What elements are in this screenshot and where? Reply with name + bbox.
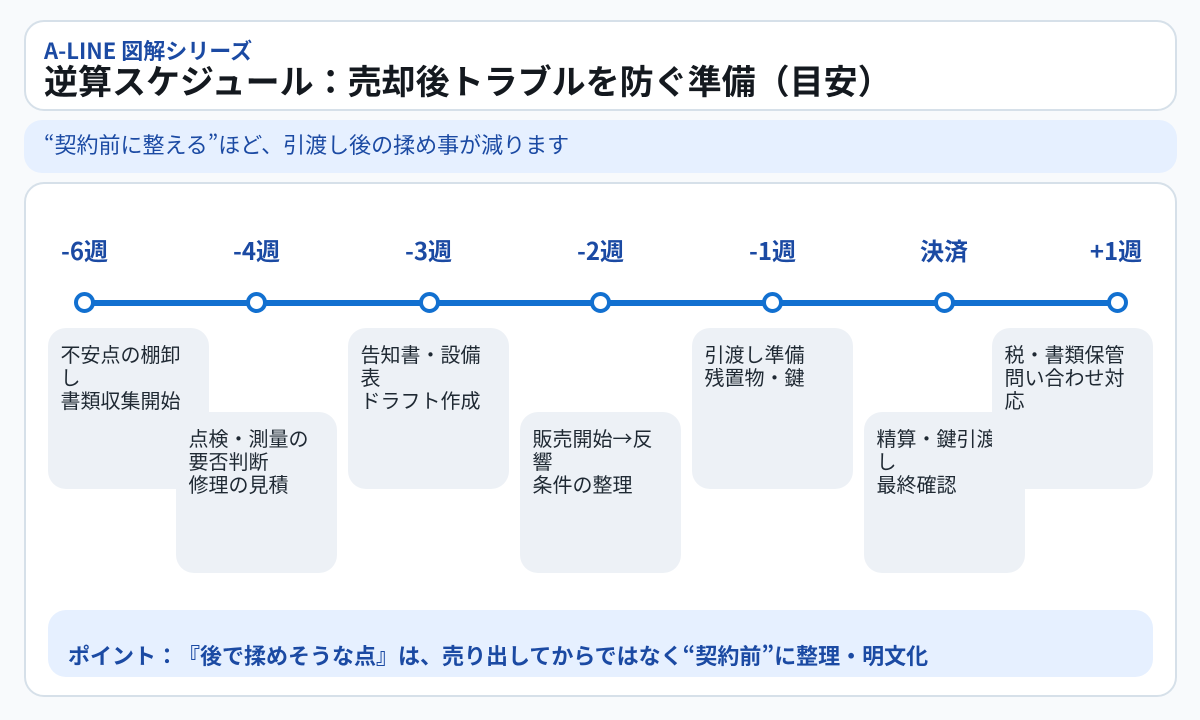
card: -6 weeks: 書類収集開始: [60, 385, 180, 414]
marker: -2 weeks: [590, 292, 611, 313]
series label: A-LINE 図解シリーズ: [44, 34, 252, 66]
card: +1 week: 問い合わせ対: [1004, 362, 1124, 391]
card: +1 week: 応: [1004, 385, 1024, 414]
callout: point: [48, 610, 1153, 677]
panel: timeline: [24, 182, 1177, 697]
card: +1 week: 税・書類保管: [1004, 339, 1124, 368]
week labels: [61, 232, 1142, 267]
card: -1 week: [692, 328, 853, 489]
card: -2 weeks: [520, 412, 681, 573]
card: -2 weeks: 条件の整理: [532, 469, 632, 498]
card: settlement: し: [876, 446, 896, 475]
card: -4 weeks: 修理の見積: [188, 469, 288, 498]
card: -3 weeks: 告知書・設備: [360, 339, 480, 368]
label: -4 weeks: -4週: [233, 232, 280, 267]
marker: -3 weeks: [418, 292, 440, 313]
marker: settlement: [934, 292, 955, 313]
card: -4 weeks: 点検・測量の: [188, 423, 308, 452]
marker: +1 week: [1106, 292, 1128, 313]
panel: header: [24, 20, 1177, 111]
label: settlement: 決済: [920, 232, 968, 267]
card: -2 weeks: 販売開始→反: [532, 423, 652, 452]
card: -1 week: 引渡し準備: [704, 339, 804, 368]
timeline line with markers: [74, 292, 1128, 313]
card: -1 week: 残置物・鍵: [704, 362, 804, 391]
timeline line: [84, 300, 1117, 306]
marker: -1 week: [762, 292, 783, 313]
callout text: ポイント：『後で揉めそうな点』は、売り出してからではなく“契約前”に整理・明文化: [68, 639, 928, 671]
marker: -6 weeks: [74, 292, 95, 313]
label: -3 weeks: -3週: [405, 232, 452, 267]
card: +1 week: [992, 328, 1153, 489]
card: -4 weeks: [176, 412, 337, 573]
title: 逆算スケジュール：売却後トラブルを防ぐ準備（目安）: [44, 55, 892, 104]
label: -2 weeks: -2週: [577, 232, 624, 267]
card: settlement: 精算・鍵引渡: [876, 423, 996, 452]
card: -4 weeks: 要否判断: [188, 446, 268, 475]
card: settlement: [864, 412, 1025, 573]
card: -6 weeks: [48, 328, 209, 489]
subtitle banner: [24, 120, 1177, 173]
card: settlement: 最終確認: [876, 469, 956, 498]
card: -2 weeks: 響: [532, 446, 552, 475]
card: -6 weeks: 不安点の棚卸: [60, 339, 180, 368]
label: -1 week: -1週: [749, 232, 796, 267]
card: -6 weeks: し: [60, 362, 80, 391]
subtitle text: “契約前に整える”ほど、引渡し後の揉め事が減ります: [44, 128, 569, 160]
card: -3 weeks: 表: [360, 362, 380, 391]
card: -3 weeks: [348, 328, 509, 489]
card: -3 weeks: ドラフト作成: [360, 385, 480, 414]
marker: -4 weeks: [246, 292, 267, 313]
label: +1 week: +1週: [1090, 232, 1142, 267]
label: -6 weeks: -6週: [61, 232, 108, 267]
